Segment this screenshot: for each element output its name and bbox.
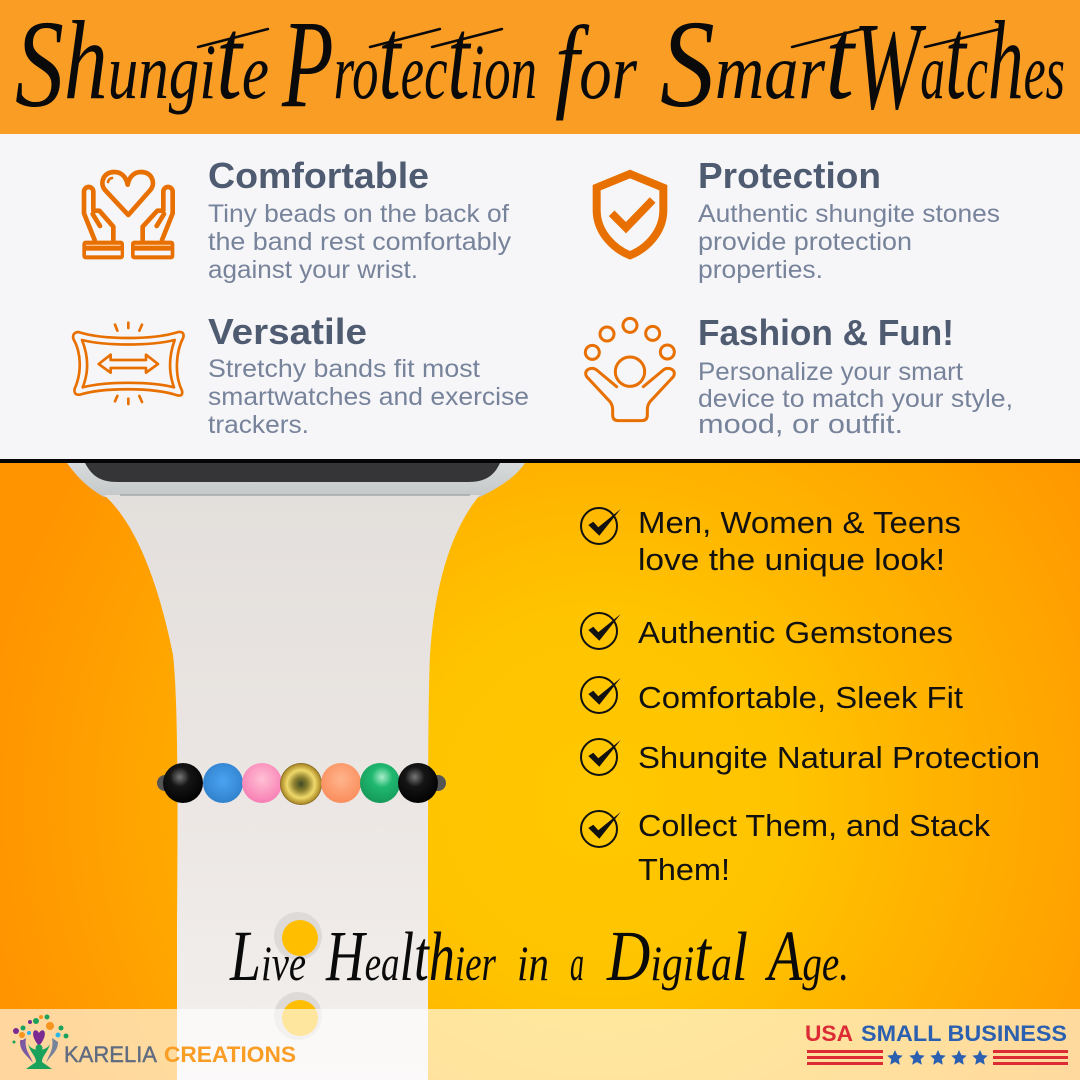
footer band (0, 1009, 1080, 1080)
text: versatile description: Stretchy bands fit most (208, 355, 480, 383)
badge: usa small business (805, 1021, 1068, 1065)
panel: gradient lower background (0, 463, 1080, 1080)
watch and strap (67, 463, 525, 1080)
tagline (229, 916, 849, 996)
text: fashion description: Personalize your smart (698, 358, 963, 386)
icon: hands holding heart (82, 172, 174, 259)
watch case (67, 463, 525, 497)
text: comfortable description: against your wrist. (208, 256, 418, 284)
panel: features (0, 134, 1080, 463)
check item: authentic gemstones: Authentic Gemstones (638, 615, 953, 650)
check item: men women teens (581, 505, 961, 577)
bead bracelet (157, 763, 446, 805)
tagline: in (517, 935, 549, 991)
tagline: a (570, 935, 584, 991)
title: S (660, 0, 715, 134)
text: fashion description (698, 358, 1013, 439)
tagline: Live (229, 916, 306, 996)
tagline: Age. (765, 916, 849, 996)
check item: men women teens: Men, Women & Teens (638, 505, 961, 540)
strap hole (274, 912, 322, 960)
tagline: Healthier (325, 916, 496, 996)
title (15, 0, 1065, 136)
check item: men women teens: love the unique look! (638, 542, 945, 577)
check item: collect and stack: Them! (638, 852, 730, 887)
text: versatile description: trackers. (208, 411, 309, 439)
icon: stretchy band with arrow (73, 323, 184, 404)
check item: collect and stack (581, 808, 991, 887)
check item: comfortable sleek fit: Comfortable, Sleek Fit (638, 680, 963, 715)
text: protection description: provide protection (698, 228, 912, 256)
icon: person juggling (585, 318, 674, 421)
logo wordmark (64, 1042, 296, 1067)
watch screen (85, 463, 500, 482)
check item: shungite natural protection: Shungite Natural Protection (638, 740, 1040, 775)
heading: protection: Protection (698, 155, 881, 196)
strap hole (274, 992, 322, 1040)
tagline: Digital (606, 916, 748, 996)
check item: collect and stack: Collect Them, and Stack (638, 808, 991, 843)
silicone strap (104, 495, 480, 1080)
logo person figure (20, 1038, 58, 1069)
badge: usa small business: USA (805, 1021, 853, 1046)
title: a (920, 28, 945, 115)
title: S (15, 0, 64, 134)
title: for (555, 4, 638, 121)
text: versatile description (208, 355, 529, 439)
text: fashion description: device to match your style, (698, 385, 1013, 413)
logo wordmark: CREATIONS (164, 1042, 296, 1067)
checklist (581, 505, 1040, 887)
logo: karelia creations (12, 1014, 296, 1069)
title: W (854, 0, 927, 136)
text: fashion description: mood, or outfit. (698, 409, 903, 439)
text: versatile description: smartwatches and exercise (208, 383, 529, 411)
badge: usa small business: SMALL BUSINESS (861, 1021, 1067, 1046)
heading: comfortable: Comfortable (208, 155, 429, 196)
logo wordmark: KARELIA (64, 1042, 157, 1067)
text: protection description (698, 200, 1000, 284)
title banner (0, 0, 1080, 136)
text: comfortable description (208, 200, 512, 284)
title: ro (334, 28, 379, 115)
logo tree dots (12, 1014, 68, 1046)
heading: versatile: Versatile (208, 311, 367, 352)
icon: shield with check (597, 174, 663, 255)
title: P (281, 0, 334, 134)
text: protection description: properties. (698, 256, 823, 284)
heading: fashion and fun: Fashion & Fun! (698, 312, 954, 353)
title: mar (715, 28, 826, 115)
text: protection description: Authentic shungite stones (698, 200, 1000, 228)
text: comfortable description: the band rest comfortably (208, 228, 512, 256)
title: h (64, 0, 108, 123)
text: comfortable description: Tiny beads on the back of (208, 200, 509, 228)
